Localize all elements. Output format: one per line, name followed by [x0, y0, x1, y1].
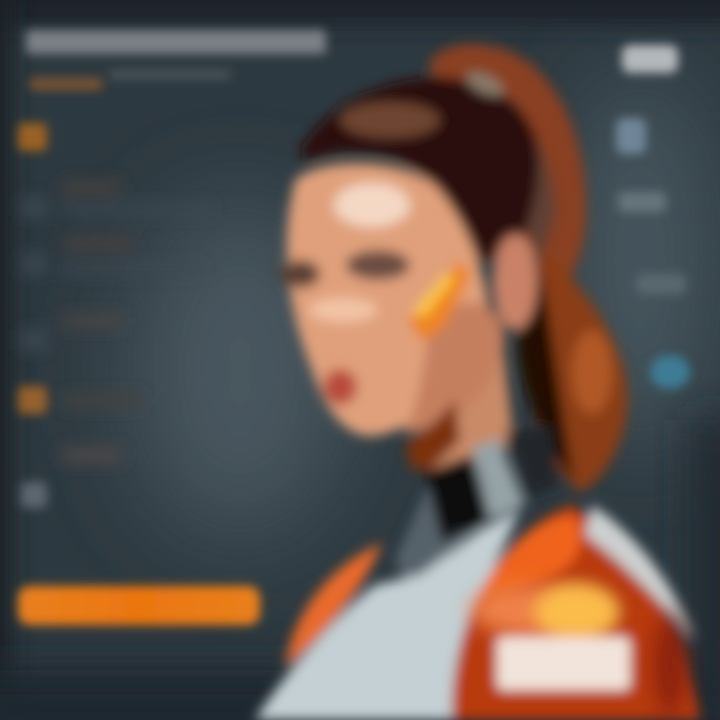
ponytail upper: [430, 44, 586, 295]
hair highlight: [340, 102, 440, 138]
sphere mid glow: [470, 585, 600, 635]
panel: right icons: [616, 45, 690, 389]
white edge: [585, 505, 695, 640]
cheek paint: [408, 262, 472, 342]
ponytail lower: [525, 250, 627, 492]
icon: grey badge: [21, 482, 47, 508]
icon: orange badge bottom: [18, 386, 47, 414]
sphere upper orange: [480, 515, 580, 600]
figure: woman: [255, 44, 700, 720]
collar light strip: [472, 438, 525, 520]
icon: grey: [618, 192, 666, 212]
white label: [497, 637, 630, 690]
dress: [255, 510, 520, 720]
hair top: [300, 78, 538, 262]
ponytail lower dark: [518, 260, 574, 480]
ear: [493, 234, 537, 330]
sun: [535, 584, 619, 640]
collar dark right: [505, 425, 560, 498]
collar dark left: [425, 455, 490, 542]
dress shade: [395, 480, 500, 590]
panel: feature list: [18, 123, 212, 508]
lips: [323, 369, 357, 405]
title: [26, 30, 326, 54]
cheek paint highlight: [412, 272, 455, 318]
orange button: [18, 586, 260, 625]
subtitle: [30, 70, 230, 90]
nose highlight: [309, 298, 377, 322]
ponytail lower highlight: [572, 330, 612, 414]
clip: [463, 67, 507, 101]
icon: teal: [650, 355, 690, 389]
lower face shade: [405, 303, 505, 434]
jaw shadow: [405, 400, 460, 470]
forehead highlight: [334, 183, 410, 227]
icon: orange badge top: [18, 123, 47, 151]
sphere lower right dark: [654, 615, 686, 715]
icon: blue: [616, 118, 646, 154]
icon: slate: [636, 274, 686, 294]
neck: [420, 320, 512, 470]
shoulder left: [285, 543, 382, 668]
face: [287, 163, 490, 436]
icon: white: [622, 45, 678, 73]
list text lines: [22, 182, 212, 462]
eye left: [280, 260, 320, 288]
eye right: [346, 250, 410, 280]
orange sphere: [452, 505, 700, 720]
ponytail mid band: [510, 95, 555, 265]
